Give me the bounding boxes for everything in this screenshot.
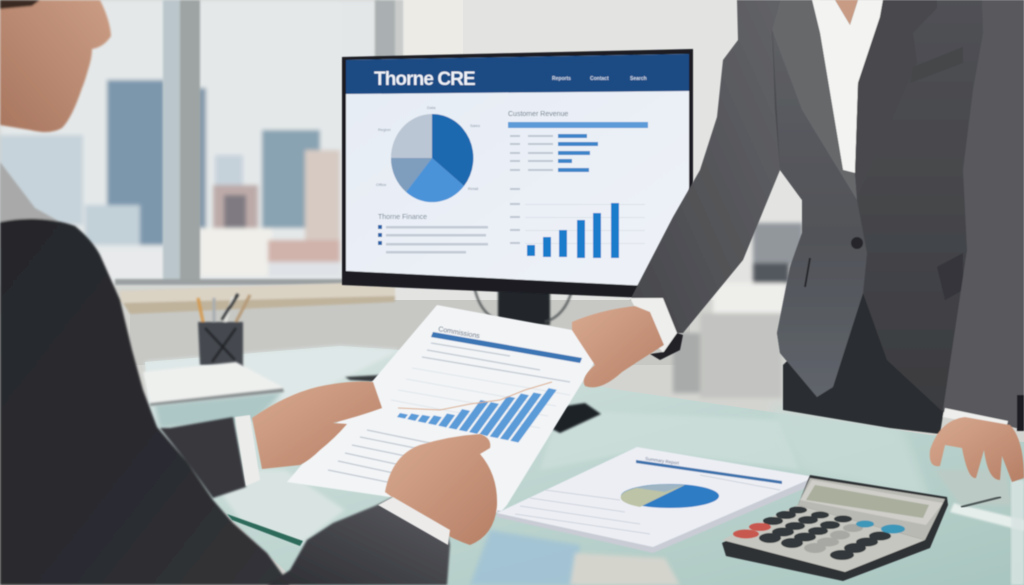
right person: pocket slit — [805, 258, 810, 287]
notepad on desk — [143, 362, 284, 406]
table header bar — [508, 122, 648, 128]
right person: chest pocket — [910, 47, 963, 83]
left person: shirt collar — [0, 162, 60, 225]
calculator display frame — [800, 480, 943, 525]
right person: shirt — [812, 0, 883, 173]
navigation labels: Contact — [590, 76, 609, 82]
right person: button — [851, 237, 863, 249]
pie chart labels: Retail — [468, 186, 478, 191]
report on desk: Summary Report — [645, 456, 680, 466]
person right — [572, 0, 1024, 482]
window sill — [120, 283, 395, 314]
right person: left jacket panel — [772, 0, 867, 397]
left person: hair — [0, 0, 40, 9]
window frames — [115, 0, 403, 285]
front hand pointing at report — [385, 434, 497, 545]
report body lines — [328, 430, 430, 483]
left hand holding report — [252, 382, 382, 469]
pie chart labels: Region — [378, 127, 391, 132]
report header bar — [431, 332, 582, 363]
right person: left cuff — [630, 298, 677, 352]
left person: jacket — [0, 219, 290, 585]
person left — [0, 0, 290, 585]
right person: cuff dark edge — [650, 333, 683, 360]
background shelf and printer — [673, 223, 803, 398]
right person: neck — [835, 0, 858, 25]
pie chart — [391, 114, 473, 202]
desk pen holder — [198, 294, 250, 368]
left person: forearm sleeve — [267, 497, 450, 585]
pie chart labels: Office — [376, 182, 387, 187]
report pie — [621, 484, 719, 508]
front shirt cuff — [378, 497, 450, 545]
right person: trousers — [783, 290, 950, 434]
right person: hand on report — [572, 306, 664, 387]
pie chart labels: Data — [427, 105, 436, 110]
report on desk — [497, 447, 815, 553]
pie chart labels — [376, 105, 480, 191]
calculator display — [806, 485, 929, 518]
monitor stand — [474, 285, 572, 325]
bullet list — [378, 225, 488, 254]
monitor screen — [346, 54, 689, 288]
window with blurred city skyline — [0, 0, 376, 285]
keyboards — [345, 374, 601, 433]
glass table — [145, 346, 1024, 585]
left person: head — [0, 0, 111, 132]
left person: raised sleeve — [160, 417, 246, 498]
navigation labels — [552, 76, 647, 82]
report grid lines — [391, 368, 570, 428]
horizontal bar rows — [510, 134, 598, 172]
report title bar — [636, 460, 782, 484]
calculator — [722, 475, 948, 581]
right person: right arm — [943, 0, 1024, 430]
navigation labels: Reports — [552, 76, 571, 82]
summary heading: Thorne Finance — [378, 214, 427, 221]
report text lines — [515, 475, 780, 534]
report intro lines — [422, 343, 570, 382]
right person: right cuff — [943, 408, 1008, 429]
right person: sleeve — [630, 0, 780, 333]
monitor header bar — [346, 54, 689, 94]
monitor — [342, 49, 693, 300]
report trend line — [398, 382, 552, 410]
navigation labels: Search — [630, 76, 647, 82]
green glass table edge — [227, 514, 303, 546]
left shirt cuff — [235, 415, 260, 486]
report bar chart — [397, 364, 557, 442]
right person: hip pocket flap — [937, 253, 963, 300]
table heading: Customer Revenue — [508, 111, 568, 118]
calculator keys — [733, 506, 905, 560]
bar chart — [510, 188, 645, 258]
right person: left lapel — [772, 0, 857, 200]
report held in hand — [287, 305, 610, 513]
right person: jacket torso — [737, 0, 1024, 420]
brand logo: Thorne CRE — [374, 69, 475, 90]
right person: hand on desk — [930, 417, 1024, 482]
right person: right lapel — [855, 0, 937, 197]
report title: Commissions — [438, 326, 481, 340]
pie chart labels: Sales — [470, 123, 480, 128]
